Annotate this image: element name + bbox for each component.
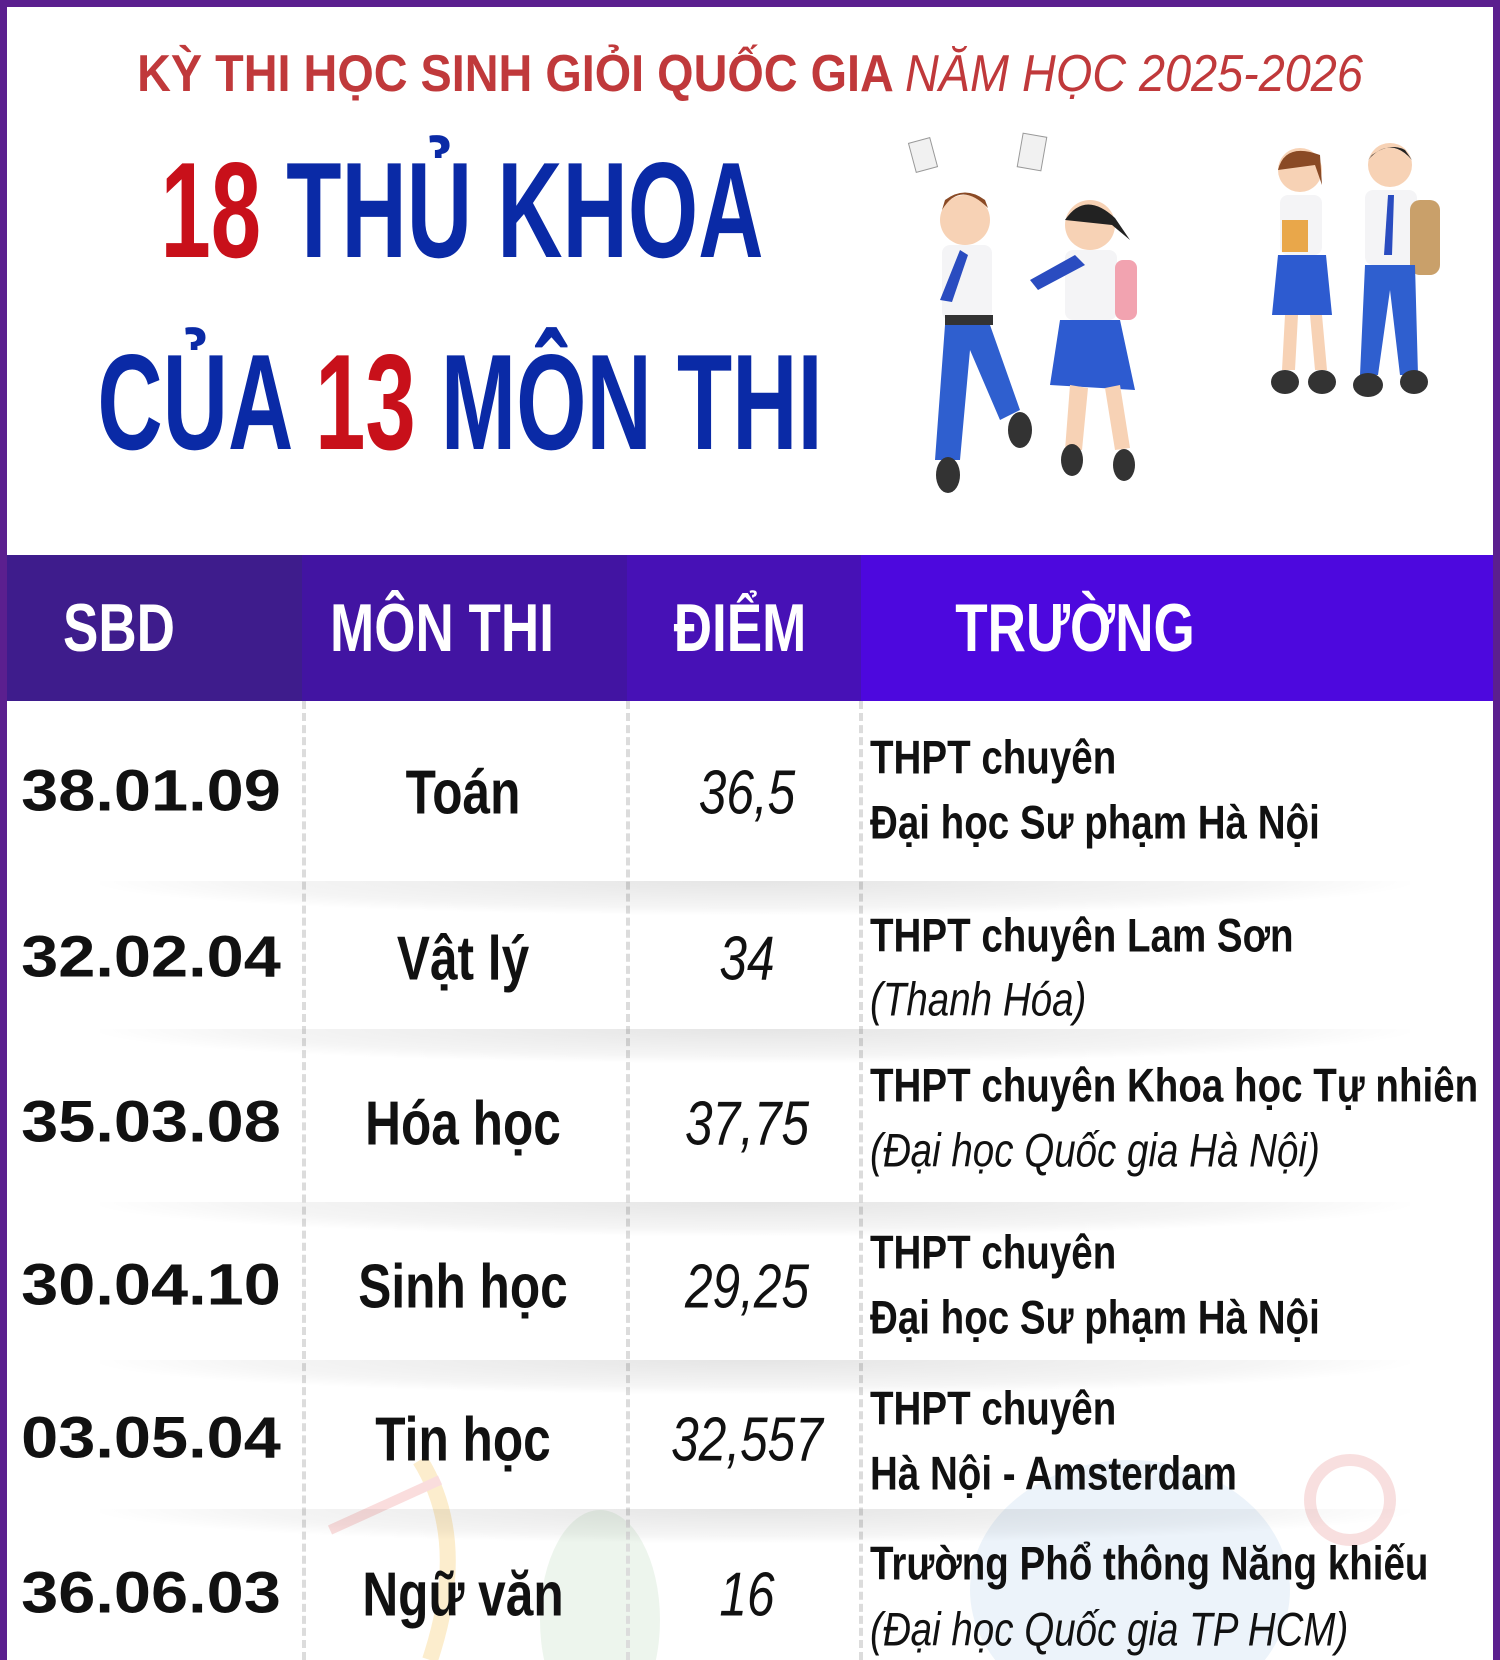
column dividers [302, 701, 306, 1660]
student 4 boy walking [1353, 143, 1440, 397]
row 3: Hóa học: (Đại học Quốc gia Hà Nội) [870, 1124, 1320, 1176]
row 1: Toán: Đại học Sư phạm Hà Nội [870, 796, 1320, 848]
row 4: Sinh học: 29,25 [685, 1252, 809, 1322]
row 2: Vật lý: 34 [719, 924, 775, 994]
row 5: Tin học: Tin học [375, 1406, 551, 1474]
student 2 jumping girl [1017, 133, 1137, 481]
row 4: Sinh học: 30.04.10 [21, 1252, 281, 1318]
header labels: MÔN THI [330, 590, 554, 666]
row 3: Hóa học [21, 1058, 1478, 1176]
table header [7, 555, 1493, 701]
row 3: Hóa học: 35.03.08 [21, 1090, 281, 1154]
row 4: Sinh học: Đại học Sư phạm Hà Nội [870, 1290, 1320, 1344]
row 6: Ngữ văn [21, 1536, 1428, 1656]
decorative faint background shapes [328, 1454, 1396, 1660]
row 2: Vật lý: THPT chuyên Lam Sơn [870, 908, 1294, 962]
row 1: Toán: THPT chuyên [870, 730, 1116, 784]
row 6: Ngữ văn: 36.06.03 [21, 1560, 281, 1626]
row 5: Tin học [21, 1382, 1237, 1500]
row 1: Toán: 36,5 [699, 758, 795, 828]
headline line 1: 18 THỦ KHOA [160, 134, 764, 286]
row 3: Hóa học: THPT chuyên Khoa học Tự nhiên [870, 1058, 1478, 1112]
header labels: ĐIỂM [674, 590, 806, 666]
row 4: Sinh học [21, 1226, 1320, 1344]
headline line 2: CỦA 13 MÔN THI [97, 326, 823, 478]
header cells [7, 555, 302, 701]
row 1: Toán [21, 730, 1320, 848]
row 5: Tin học: THPT chuyên [870, 1382, 1116, 1434]
row 2: Vật lý: 32.02.04 [21, 924, 281, 990]
row 2: Vật lý: (Thanh Hóa) [870, 972, 1086, 1026]
row 3: Hóa học: Hóa học [365, 1090, 561, 1158]
row 6: Ngữ văn: Trường Phổ thông Năng khiếu [870, 1536, 1428, 1590]
row 4: Sinh học: THPT chuyên [870, 1226, 1116, 1278]
row 4: Sinh học: Sinh học [358, 1252, 568, 1322]
row 2: Vật lý [21, 908, 1294, 1026]
illustration: students [908, 132, 1440, 493]
header labels: TRƯỜNG [955, 590, 1195, 666]
row 2: Vật lý: Vật lý [397, 924, 529, 994]
row 5: Tin học: 03.05.04 [21, 1406, 281, 1470]
header labels [63, 590, 1195, 666]
row 6: Ngữ văn: (Đại học Quốc gia TP HCM) [870, 1602, 1348, 1656]
header labels: SBD [63, 590, 175, 666]
row 3: Hóa học: 37,75 [685, 1090, 809, 1158]
student 3 girl walking [1271, 148, 1336, 394]
row 1: Toán: Toán [406, 758, 520, 828]
row separators [100, 881, 1410, 915]
title: KỲ THI HỌC SINH GIỎI QUỐC GIA NĂM HỌC 2025-2026 [137, 45, 1363, 103]
row 6: Ngữ văn: 16 [719, 1560, 775, 1630]
row 6: Ngữ văn: Ngữ văn [362, 1560, 564, 1630]
row 1: Toán: 38.01.09 [21, 758, 281, 824]
student 1 jumping boy [908, 138, 1032, 493]
row 5: Tin học: Hà Nội - Amsterdam [870, 1446, 1237, 1500]
row 5: Tin học: 32,557 [671, 1406, 823, 1474]
